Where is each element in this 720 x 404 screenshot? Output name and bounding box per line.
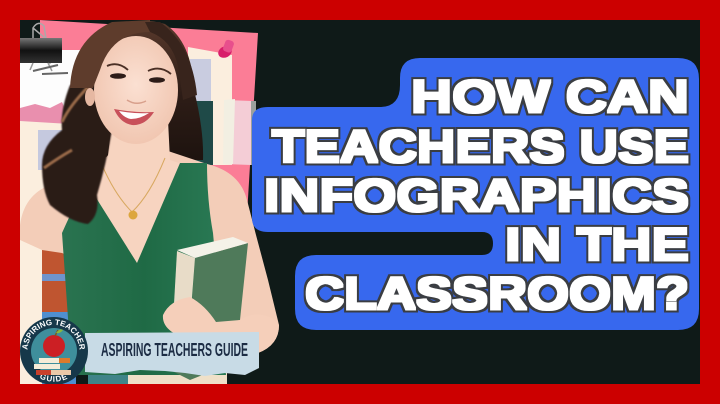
- title text: HOW CAN: [411, 71, 689, 122]
- dress: [62, 163, 226, 375]
- mouth: [114, 109, 154, 125]
- icon: apple: [43, 329, 65, 357]
- face: [94, 36, 178, 144]
- ear: [85, 88, 95, 106]
- icon: book: [170, 237, 248, 380]
- title text: IN THE: [505, 219, 689, 270]
- long left hair: [42, 80, 112, 224]
- title text: CLASSROOM?: [305, 268, 689, 319]
- logo badge: ASPIRING TEACHER: [22, 319, 85, 350]
- channel name banner: ASPIRING TEACHERS GUIDE: [101, 340, 248, 360]
- collage background: [20, 20, 258, 384]
- icon: books: [34, 358, 71, 375]
- woman: [20, 20, 279, 375]
- logo badge: GUIDE: [40, 375, 68, 382]
- icon: push pin: [218, 40, 234, 58]
- hair back: [100, 21, 203, 165]
- necklace: [102, 158, 165, 212]
- logo badge: [20, 317, 88, 384]
- eyes and brows: [107, 64, 171, 74]
- channel name banner: [85, 332, 259, 376]
- icon: binder clip: [20, 23, 68, 74]
- nose shadow: [127, 100, 146, 103]
- arms and shoulders: [20, 150, 279, 353]
- title text: [264, 71, 689, 319]
- front hair: [70, 20, 150, 88]
- blue title panel: [252, 58, 699, 330]
- title text: INFOGRAPHICS: [264, 170, 689, 221]
- neck and chest: [106, 124, 170, 157]
- title text: TEACHERS USE: [272, 121, 689, 172]
- hand and forearm: [163, 297, 279, 353]
